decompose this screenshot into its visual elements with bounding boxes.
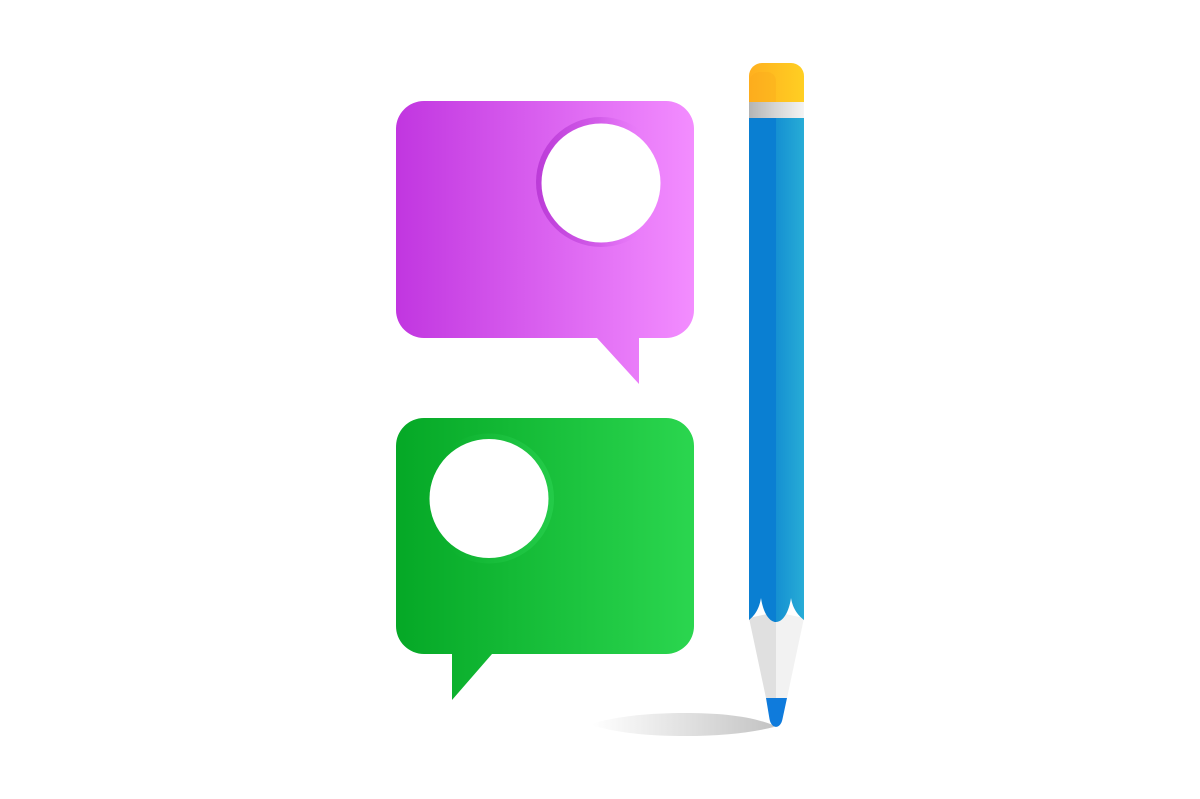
green speech bubble — [396, 418, 694, 700]
pencil eraser — [749, 63, 804, 102]
purple bubble ring — [536, 117, 666, 247]
pencil shadow — [590, 713, 774, 736]
purple speech bubble — [396, 101, 694, 384]
pencil wood cone — [749, 612, 804, 698]
purple bubble white circle — [542, 124, 660, 242]
green bubble body and tail — [396, 418, 694, 700]
green bubble white circle — [430, 439, 548, 558]
pencil lead tip — [766, 698, 787, 727]
purple bubble body and tail — [396, 101, 694, 384]
pencil — [749, 63, 804, 727]
pencil metal band — [749, 102, 804, 118]
pencil blue body — [749, 118, 804, 622]
green bubble ring — [424, 434, 554, 564]
